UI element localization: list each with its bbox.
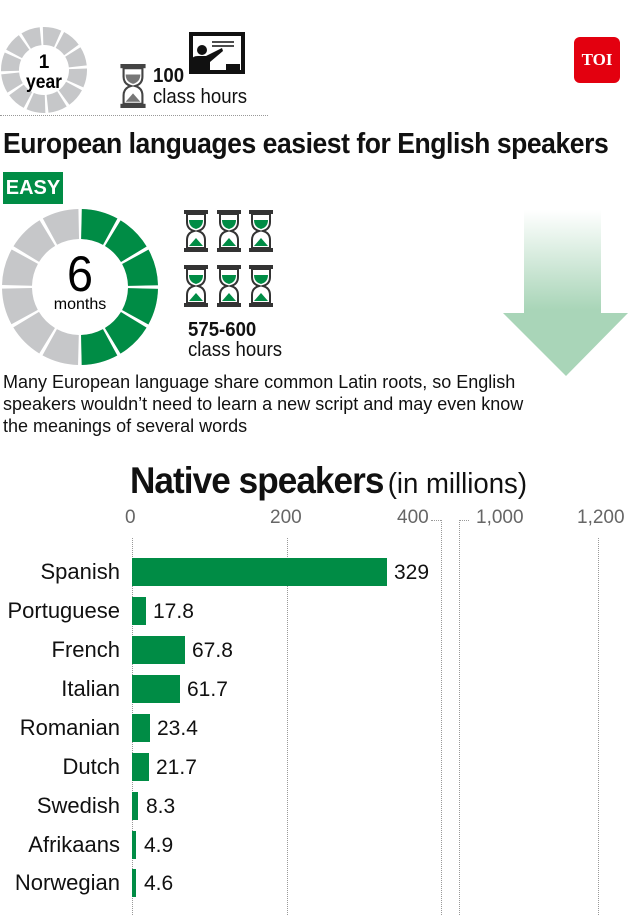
text: description: Many European language share common Latin roots, so English speakers wouldn’t need to learn a new script and may even know the meanings of several words	[3, 372, 523, 436]
bar chart: Afrikaans	[28, 832, 120, 857]
icon: teacher	[189, 32, 245, 74]
bar chart	[7, 507, 625, 915]
divider dotted	[0, 115, 268, 116]
bar chart: French	[52, 637, 120, 662]
bar chart: Italian	[61, 676, 120, 701]
label: EASY: EASY	[6, 177, 60, 199]
bar chart: Swedish	[37, 793, 120, 818]
bar chart: 400	[397, 507, 429, 528]
icon: 6 months ring	[2, 209, 158, 365]
bar chart: 61.7	[187, 678, 228, 701]
text: 575-600 class hours: class hours	[188, 339, 282, 361]
bar chart: 21.7	[156, 756, 197, 779]
bar chart: Romanian	[20, 715, 120, 740]
bar chart: Norwegian	[15, 870, 120, 895]
text: 100 class hours: 100	[153, 65, 184, 87]
icon: 6 months ring: months	[54, 296, 106, 313]
bar chart: 4.9	[144, 834, 173, 857]
icon: 1 year ring: 1	[39, 52, 50, 73]
bar chart: 329	[394, 561, 429, 584]
text: 575-600 class hours: 575-600	[188, 319, 256, 341]
icon: 6 months ring: 6	[67, 246, 93, 302]
text: 100 class hours: class hours	[153, 86, 247, 108]
arrow: down gradient	[503, 220, 628, 376]
text: 100 class hours	[153, 65, 247, 108]
icon: 1 year ring: year	[26, 72, 63, 93]
bar chart: 67.8	[192, 639, 233, 662]
title: European languages easiest for English speakers	[3, 128, 608, 160]
bar chart: Spanish	[40, 559, 120, 584]
bar chart: 8.3	[146, 795, 175, 818]
icon: 1 year ring	[1, 27, 87, 113]
icon: hourglass gray	[120, 64, 146, 108]
label: EASY	[3, 172, 63, 204]
logo: TOI: TOI	[582, 50, 612, 69]
text: 575-600 class hours	[188, 319, 282, 361]
bar chart: 1,000	[476, 507, 524, 528]
bar chart: 1,200	[577, 507, 625, 528]
chart heading: Native speakers (in millions)	[130, 460, 527, 501]
icon: six hourglasses	[184, 210, 273, 307]
bar chart: 23.4	[157, 717, 198, 740]
bar chart: 0	[125, 507, 136, 528]
bar chart: 4.6	[144, 872, 173, 895]
bar chart: Portuguese	[7, 598, 120, 623]
bar chart: 17.8	[153, 600, 194, 623]
bar chart: Dutch	[63, 754, 120, 779]
bar chart: 200	[270, 507, 302, 528]
logo: TOI	[574, 37, 620, 83]
